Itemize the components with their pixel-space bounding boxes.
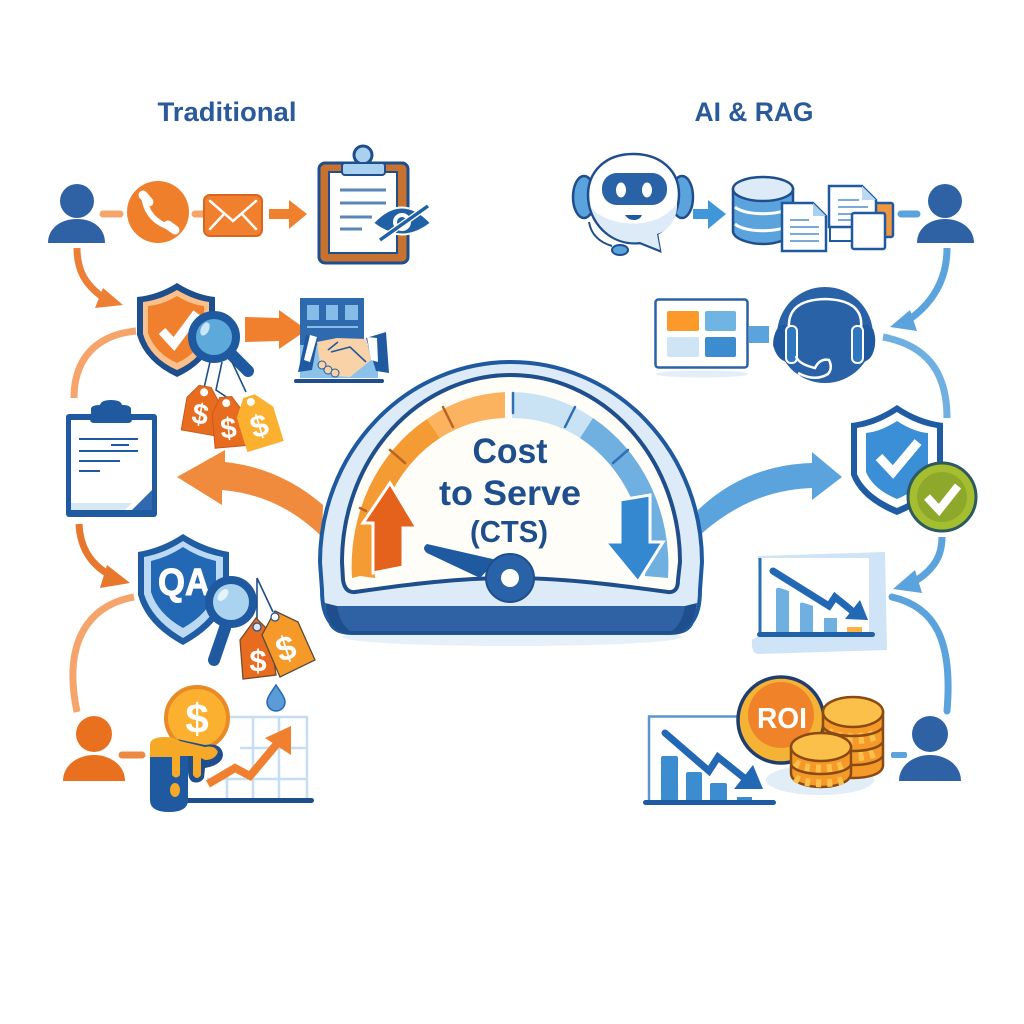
gauge needle bbox=[424, 544, 534, 602]
icon: phone bbox=[127, 181, 189, 243]
curved arrow to chart bbox=[893, 537, 942, 593]
icon: coin stack rear bbox=[823, 697, 883, 778]
chart: cost to serve gauge bbox=[320, 362, 702, 646]
orange cost band bbox=[352, 392, 505, 578]
curved arrow from agent to shield bbox=[883, 337, 947, 418]
icon: QA shield bbox=[138, 534, 229, 645]
label: QA: QA bbox=[158, 562, 210, 604]
coin shadow bbox=[766, 765, 874, 795]
icon: document stack bbox=[829, 186, 893, 249]
curved arrow to QA shield bbox=[79, 524, 130, 588]
arrow to handshake bbox=[245, 310, 307, 349]
heading: AI & RAG: AI & RAG bbox=[694, 97, 814, 127]
icon: customer top right bbox=[917, 184, 974, 243]
connector dash bbox=[195, 210, 203, 218]
icon: paint pot with dripping cost bbox=[150, 737, 223, 812]
icon: blue report clipboard bbox=[66, 400, 157, 517]
gauge down arrow bbox=[605, 495, 663, 582]
icon: ROI coin bbox=[738, 677, 824, 763]
icon: envelope bbox=[204, 195, 262, 236]
icon: water drop bbox=[267, 685, 285, 711]
gauge label: Cost bbox=[472, 432, 548, 471]
icon: two price tags: $ bbox=[271, 628, 301, 670]
icon: customer bottom left bbox=[63, 716, 125, 781]
arrow: gauge to traditional bbox=[177, 450, 323, 537]
icon: clipboard with hidden eye bbox=[319, 146, 431, 263]
icon: customer top left bbox=[48, 184, 105, 243]
gauge up arrow bbox=[363, 483, 417, 573]
icon: office handshake bbox=[294, 298, 389, 383]
gauge label: to Serve bbox=[439, 474, 581, 513]
curved arrow from shield to report bbox=[74, 331, 136, 398]
icon: dollar coin bbox=[166, 687, 228, 749]
arrow: gauge to AI and RAG bbox=[698, 452, 842, 535]
connector dash bbox=[901, 210, 917, 218]
heading: Traditional: Traditional bbox=[158, 97, 296, 127]
icon: QA magnifier bbox=[209, 580, 253, 660]
icon: price tags on strings bbox=[181, 362, 284, 452]
panel: AI and RAG workflow bbox=[573, 154, 976, 805]
icon: customer bottom right bbox=[899, 716, 961, 781]
icon: price tags on strings: $ bbox=[219, 412, 238, 446]
arrow to database bbox=[693, 200, 726, 229]
curved arrow from customer to QA bbox=[73, 597, 134, 712]
connector bar bbox=[749, 326, 769, 343]
icon: document one bbox=[782, 203, 826, 251]
icon: orange shield with check bbox=[137, 283, 215, 377]
icon: database bbox=[733, 177, 793, 244]
chart: falling cost panel bbox=[752, 552, 887, 654]
icon: green check badge bbox=[908, 463, 976, 531]
curved arrow from customer to chart bbox=[892, 597, 948, 711]
panel: traditional workflow bbox=[48, 146, 431, 812]
blue cost band bbox=[512, 392, 668, 578]
icon: dashboard bbox=[656, 300, 748, 378]
icon: dollar coin: $ bbox=[185, 695, 209, 742]
connector dash bbox=[891, 752, 907, 758]
gauge label: (CTS) bbox=[470, 514, 548, 549]
gauge label bbox=[439, 432, 581, 549]
icon: price tags on strings: $ bbox=[246, 407, 273, 445]
connector dash bbox=[103, 210, 120, 218]
icon: two price tags bbox=[240, 578, 315, 679]
gauge outer housing bbox=[320, 362, 702, 633]
gauge dial face bbox=[342, 375, 680, 592]
icon: robot chatbot bbox=[573, 154, 693, 255]
chart: rising cost grid bbox=[185, 717, 314, 803]
curved arrow to agent bbox=[890, 248, 947, 331]
chart: falling cost bars bbox=[643, 716, 776, 805]
connector dash bbox=[122, 752, 142, 758]
gauge base bbox=[325, 603, 697, 634]
icon: two price tags: $ bbox=[249, 643, 267, 678]
gauge shadow bbox=[342, 628, 682, 646]
icon: coin stack front bbox=[791, 733, 851, 787]
curved arrow to orange shield bbox=[77, 248, 123, 308]
icon: ROI coin: ROI bbox=[757, 703, 807, 735]
icon: price tags on strings: $ bbox=[189, 398, 211, 432]
arrow to clipboard bbox=[269, 200, 307, 229]
icon: blue shield with check bbox=[851, 405, 943, 515]
icon: magnifier bbox=[192, 315, 248, 371]
icon: headset agent bbox=[770, 287, 875, 385]
